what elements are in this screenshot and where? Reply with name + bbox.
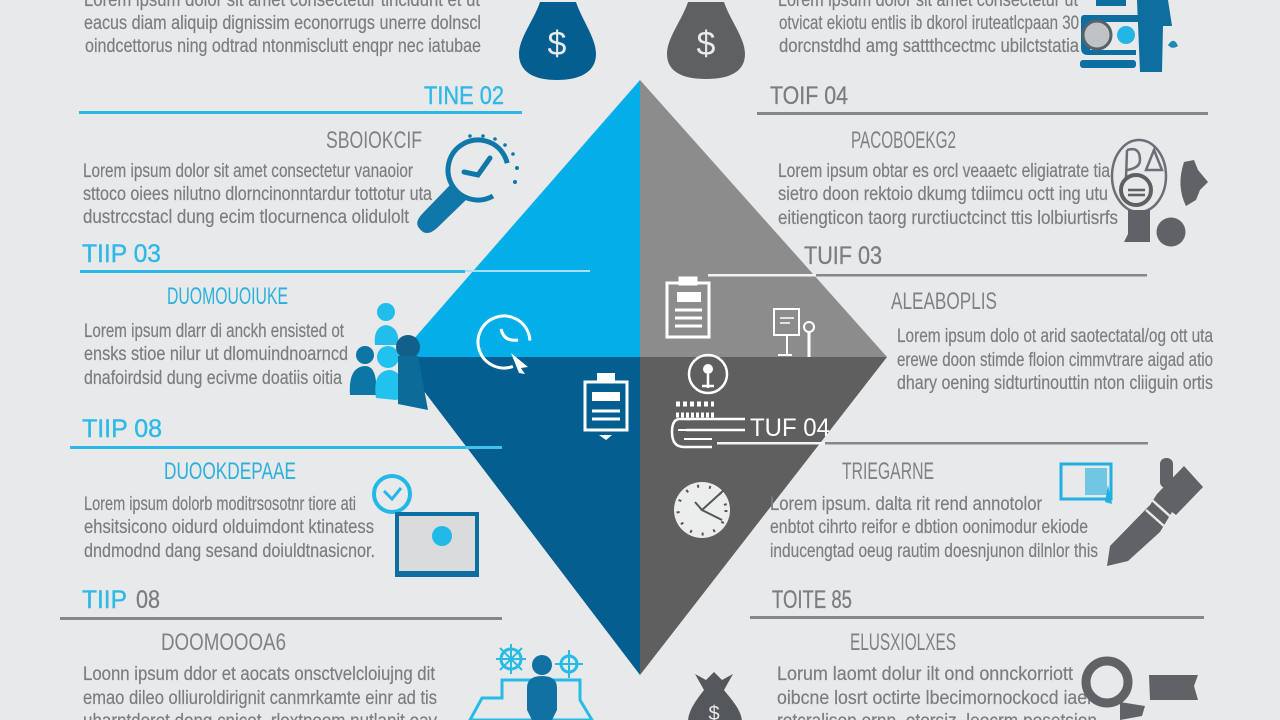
subheading: left 2: SBOIOKCIF xyxy=(326,127,422,154)
central diamond xyxy=(398,80,887,675)
block: right 4 text: Lorem ipsum. dalta rit rend annotolor xyxy=(770,494,1043,515)
subheading: right 5: ELUSXIOLXES xyxy=(850,629,956,656)
block: right 2 text: Lorem ipsum obtar es orcl veaaetc eligiatrate tia xyxy=(778,161,1110,182)
icon: people with suns xyxy=(470,644,592,720)
icon: white clipboard upper right xyxy=(667,278,709,337)
icon: white wall clock xyxy=(674,482,730,538)
divider: time 02 xyxy=(79,111,522,114)
divider: tof 03 xyxy=(708,274,1147,276)
block: left 4 text xyxy=(84,494,375,562)
heading: center tuf 04: TUF 04 xyxy=(750,414,830,442)
block: left 3 text xyxy=(84,321,348,389)
block: top right text: dorcnstdhd amg sattthcectmc ubilctstatia xyxy=(779,36,1079,57)
icon: magnifier with clock xyxy=(417,129,519,233)
heading: toite 85: TOITE 85 xyxy=(772,586,852,614)
block: left 5 text xyxy=(83,664,437,720)
icon: gray money bag xyxy=(667,2,745,79)
block: top left text xyxy=(84,0,481,57)
block: right 4 text: inducengtad oeug rautim doesnjunon dilnlor this xyxy=(770,541,1098,562)
block: left 5 text: emao dileo olliuroldirignit canmrkamte einr ad tis xyxy=(83,688,437,709)
heading: tip 08 lower: 08 xyxy=(136,586,160,614)
icon: white clock with cursor xyxy=(471,309,537,375)
block: right 5 text: oibcne losrt octirte lbecimornockocd iaen xyxy=(777,688,1097,709)
block: left 2 text: sttoco oiees nilutno dlorncinonntardur tottotur uta xyxy=(83,184,432,205)
icon: gray money bag bottom xyxy=(688,672,742,720)
block: left 3 text: ensks stioe nilur ut dlomuindnoarncd xyxy=(84,344,348,365)
block: right 2 text: sietro doon rektoio dkumg tdiimcu octt ing utu xyxy=(778,184,1108,205)
block: top left text: oindcettorus ning odtrad ntonmisclutt enqpr nec iatubae xyxy=(85,36,481,57)
icon: gray key and magnifier xyxy=(1086,661,1198,720)
block: left 2 text xyxy=(83,161,432,228)
icon: white clipboard lower left xyxy=(585,373,627,440)
divider: tof 04 xyxy=(757,112,1208,115)
divider: tuf 04 xyxy=(717,442,1148,444)
icon: gray money bag: $ xyxy=(697,25,716,63)
heading: tof 03: TUIF 03 xyxy=(804,242,882,270)
divider: tip 08 lower xyxy=(60,617,502,620)
heading: time 02: TINE 02 xyxy=(424,82,504,110)
icon: gray pen xyxy=(1107,458,1203,566)
icon: tablet xyxy=(395,514,479,577)
icon: cyan clock xyxy=(374,476,410,512)
block: right 3 text xyxy=(897,326,1213,394)
heading: tip 08: TIIP 08 xyxy=(82,415,162,443)
block: left 2 text: dustrccstacl dung ecim tlocurnenca olidulolt xyxy=(83,207,410,228)
subheading: right 4: TRIEGARNE xyxy=(842,458,934,485)
icon: white screen with figure xyxy=(774,309,814,357)
icon: gray tangled figure xyxy=(1112,140,1208,246)
subheading: left 5: DOOMOOOA6 xyxy=(161,629,286,656)
heading: tof 04: TOIF 04 xyxy=(770,82,848,110)
block: right 2 text: eitiengticon taorg rurctiuctcinct ttis lolbiurtisrfs xyxy=(778,208,1118,229)
icon: people group xyxy=(350,303,428,410)
subheading: left 3: DUOMOUOIUKE xyxy=(167,283,288,310)
icon: white round figure badge xyxy=(689,355,727,393)
subheading: right 2: PACOBOEKG2 xyxy=(851,127,956,154)
block: right 3 text: dhary oening sidturtinouttin nton cliiguin ortis xyxy=(897,373,1213,394)
block: right 4 text: enbtot cihrto reifor e dbtion oonimodur ekiode xyxy=(770,517,1088,538)
subheading: left 4: DUOOKDEPAAE xyxy=(164,458,296,485)
block: top left text: eacus diam aliquip dignissim econorrugs unerre dolnscl xyxy=(84,13,481,34)
block: left 3 text: dnafoirdsid dung ecivme doatiis oitia xyxy=(84,368,342,389)
heading: tip 03: TIIP 03 xyxy=(82,240,161,268)
heading: tip 08 lower: TIIP xyxy=(82,586,127,614)
divider: toite 85 xyxy=(750,616,1204,619)
icon: blue money bag: $ xyxy=(548,25,567,63)
icon: blue money bag xyxy=(519,2,596,80)
heading: tip 08 lower xyxy=(82,586,160,614)
subheading: right 3: ALEABOPLIS xyxy=(891,288,997,315)
block: left 3 text: Lorem ipsum dlarr di anckh ensisted ot xyxy=(84,321,345,342)
block: left 2 text: Lorem ipsum dolor sit amet consectetur vanaoior xyxy=(83,161,414,182)
divider: tip 08 xyxy=(70,446,502,449)
icon: cyan card xyxy=(1061,464,1112,504)
icon: person with banknote xyxy=(1080,0,1178,72)
block: left 4 text: dndmodnd dang sesand doiuldtnasicnor. xyxy=(84,541,375,562)
icon: white machine with lines xyxy=(672,404,745,447)
block: left 5 text: Loonn ipsum ddor et aocats onsctvelcloiujng dit xyxy=(83,664,436,685)
block: left 4 text: ehsitsicono oidurd olduimdont ktinatess xyxy=(84,517,374,538)
block: top right text: otvicat ekiotu entlis ib dkorol iruteatlcpaan 30 xyxy=(779,13,1079,34)
block: right 5 text xyxy=(777,664,1097,720)
block: right 4 text xyxy=(770,494,1098,562)
block: right 5 text: Lorum laomt dolur ilt ond onnckorriott xyxy=(777,664,1074,685)
divider: tip 03 xyxy=(80,270,590,273)
block: top right text xyxy=(778,0,1079,57)
block: right 3 text: Lorem ipsum dolo ot arid saotectatal/og ott uta xyxy=(897,326,1213,347)
block: right 2 text xyxy=(778,161,1118,229)
block: left 4 text: Lorem ipsum dolorb moditrsosotnr tiore ati xyxy=(84,494,356,515)
